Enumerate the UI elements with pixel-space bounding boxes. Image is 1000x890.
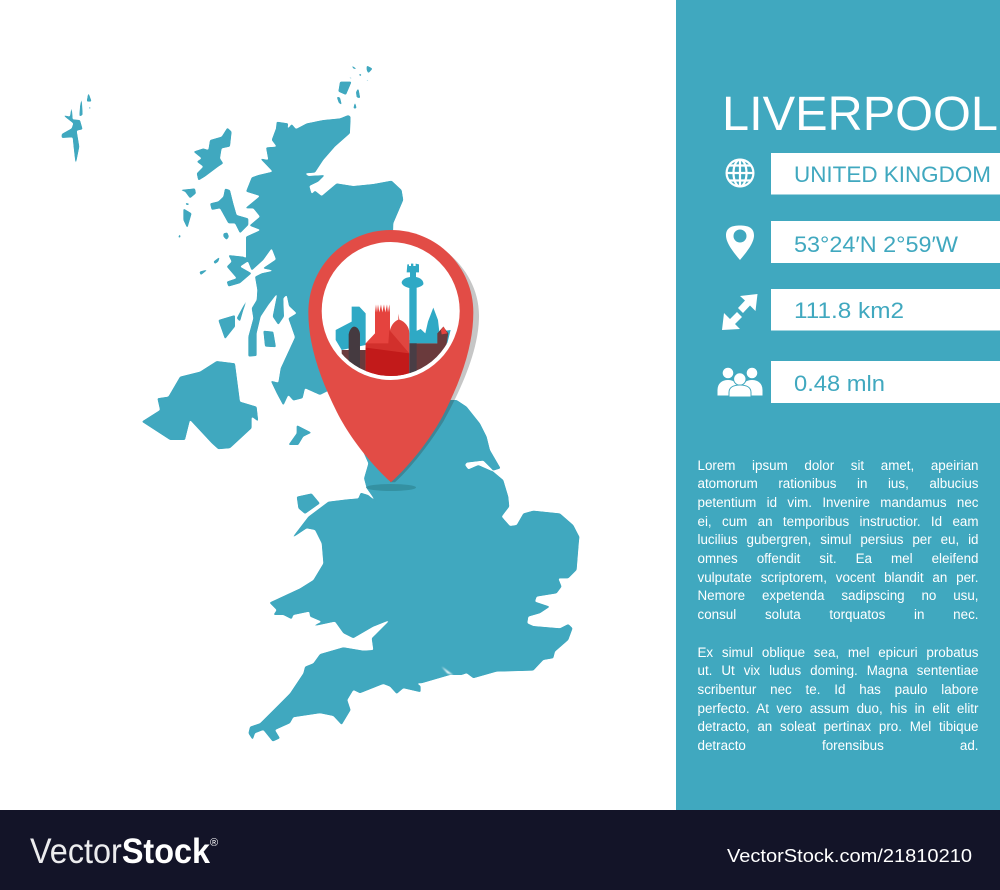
text block: second paragraph: perfecto. At vero assum duo, his in elit elitr bbox=[698, 701, 978, 716]
map region: England and Wales bbox=[248, 400, 579, 742]
text block: first paragraph bbox=[698, 458, 978, 622]
pin ground shadow bbox=[366, 484, 416, 491]
skyline: cathedral tower bbox=[366, 304, 409, 353]
footer band bbox=[0, 810, 1000, 890]
skyline: dark brown base left bbox=[342, 350, 366, 371]
country label: UNITED KINGDOM bbox=[794, 162, 991, 187]
skyline: dome bbox=[389, 314, 409, 353]
map: United Kingdom bbox=[62, 65, 579, 742]
text block: first paragraph: Lorem ipsum dolor sit amet, apeirian bbox=[698, 458, 978, 472]
skyline: deep red base bbox=[366, 348, 409, 378]
text block: second paragraph: ut. Ut vix ludus doming. Magna sententiae bbox=[698, 663, 978, 678]
title: LIVERPOOL bbox=[722, 87, 998, 141]
info row: population bbox=[717, 361, 1000, 403]
map region: Isle of Man bbox=[288, 425, 312, 445]
skyline: radio tower bbox=[402, 264, 423, 375]
info row: coordinates bbox=[726, 221, 1000, 263]
text block: second paragraph: detracto forensibus ad. bbox=[698, 738, 978, 753]
text block: first paragraph: consul soluta torquatos in nec. bbox=[698, 607, 978, 622]
coordinates label: 53°24′N 2°59′W bbox=[794, 232, 959, 257]
skyline: cathedral lower shade bbox=[366, 330, 409, 378]
text block: first paragraph: petentium id vim. Invenire mandamus nec bbox=[698, 495, 978, 510]
skyline illustration bbox=[336, 264, 460, 378]
icon: people bbox=[717, 367, 763, 397]
label bar bbox=[771, 221, 1000, 263]
map pin with Liverpool skyline bbox=[308, 230, 479, 491]
footer logo: VectorStock bbox=[30, 832, 210, 871]
map region: Anglesey bbox=[297, 493, 320, 514]
text block: first paragraph: ei, cum an temporibus instructior. Id eam bbox=[698, 514, 978, 529]
skyline: brown base right bbox=[410, 326, 448, 373]
text block: second paragraph: detracto, an soleat pertinax pro. Mel tibique bbox=[698, 719, 978, 734]
text block: first paragraph: atomorum rationibus in ius, albucius bbox=[698, 476, 978, 491]
map region: Northern Ireland bbox=[142, 361, 258, 449]
skyline: teal buildings left bbox=[336, 307, 366, 350]
info row: area bbox=[722, 289, 1000, 330]
map region: Scotland with islands bbox=[142, 65, 403, 449]
text block: second paragraph: scribentur nec te. Id has paulo labore bbox=[698, 682, 978, 697]
icon: diagonal arrows bbox=[722, 294, 758, 330]
icon: globe bbox=[727, 160, 753, 186]
footer image id: VectorStock.com/21810210 bbox=[727, 846, 972, 866]
text block: first paragraph: omnes offendit sit. Ea mel eleifend bbox=[698, 551, 978, 566]
population label: 0.48 mln bbox=[794, 371, 885, 396]
icon: location pin bbox=[726, 226, 754, 260]
info row: country bbox=[727, 153, 1000, 194]
map region: Shetland islands bbox=[62, 92, 92, 165]
label bar bbox=[771, 289, 1000, 330]
pin drop shadow bbox=[390, 253, 479, 482]
footer logo: ® bbox=[210, 837, 218, 849]
label bar bbox=[771, 153, 1000, 194]
label bar bbox=[771, 361, 1000, 403]
pin body bbox=[308, 230, 473, 482]
area label: 111.8 km2 bbox=[794, 298, 904, 323]
pin white circle bbox=[322, 242, 460, 380]
skyline: teal buildings right bbox=[415, 308, 451, 343]
text block: first paragraph: Nemore expetenda sadipscing no usu, bbox=[698, 588, 978, 603]
text block: second paragraph bbox=[698, 644, 978, 753]
skyline: dark dome tower bbox=[349, 327, 360, 368]
text block: first paragraph: lucilius gubergren, simul persius per eu, id bbox=[698, 532, 978, 547]
text block: second paragraph: Ex simul oblique sea, mel epicuri probatus bbox=[698, 644, 978, 660]
text block: first paragraph: vulputate scriptorem, vocent blandit an per. bbox=[698, 570, 978, 585]
panel: side information background bbox=[676, 0, 1000, 810]
